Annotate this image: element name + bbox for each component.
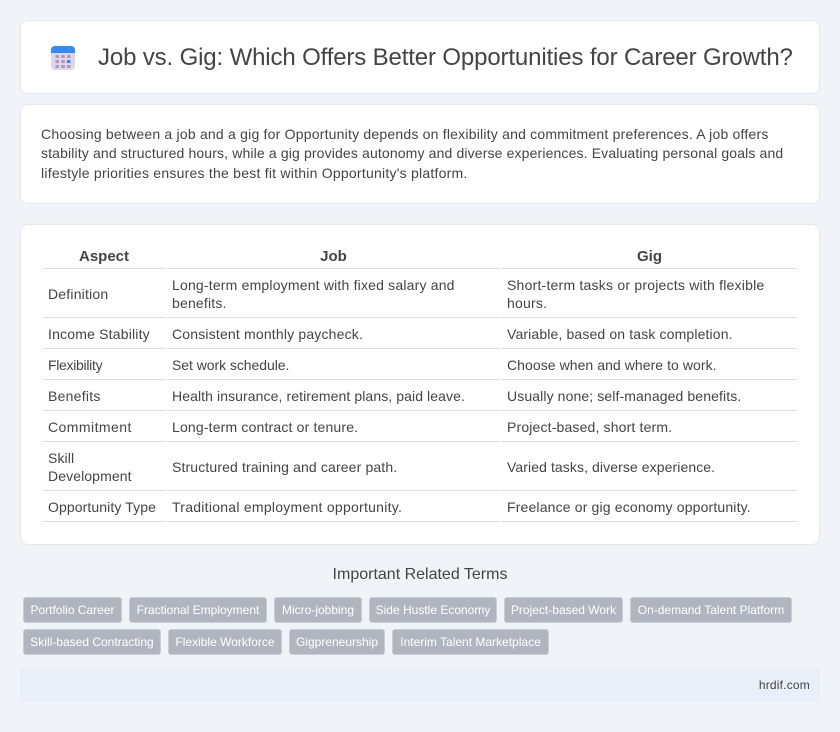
row: Income Stability: Income Stability [48, 326, 150, 342]
cell: Opportunity Type, job: Traditional employment opportunity. [172, 499, 402, 515]
cell: Skill Development, gig: Varied tasks, diverse experience. [507, 459, 715, 475]
text block: intro line 3: lifestyle priorities ensures the best fit within Opportunity's platform. [41, 165, 468, 181]
tag [129, 597, 267, 623]
tag [369, 597, 497, 623]
tag [23, 629, 161, 655]
cell: Skill Development, job: Structured training and career path. [172, 459, 397, 475]
text block: intro line 2: stability and structured hours, while a gig provides autonomy and diverse experiences. Evaluating personal goals and [41, 145, 783, 161]
row: Commitment: Commitment [48, 419, 132, 435]
cell: Definition, gig: Short-term tasks or projects with flexible [507, 277, 764, 293]
cell: Definition, job: Long-term employment with fixed salary and [172, 277, 455, 293]
table header: Aspect: Aspect [79, 248, 129, 265]
row: Benefits: Benefits [48, 388, 101, 404]
cell: Definition, job [172, 277, 455, 311]
row: Skill Development [48, 450, 132, 484]
tag: Skill-based Contracting [30, 635, 154, 649]
panel: title header [20, 20, 820, 94]
tag: Fractional Employment [137, 603, 259, 617]
row: Flexibility: Flexibility [48, 357, 102, 373]
tag: Project-based Work [511, 603, 616, 617]
tag [289, 629, 385, 655]
tag list: related terms [23, 597, 792, 655]
panel: comparison table [20, 224, 820, 545]
footer source: hrdif.com [759, 678, 810, 692]
row: Opportunity Type: Opportunity Type [48, 499, 156, 515]
table header: Gig: Gig [637, 248, 662, 265]
cell: Benefits, job: Health insurance, retirement plans, paid leave. [172, 388, 465, 404]
tag [392, 629, 549, 655]
text block: intro line 1: Choosing between a job and a gig for Opportunity depends on flexibility and commitment preferences. A job offers [41, 126, 769, 142]
cell: Income Stability, gig: Variable, based on task completion. [507, 326, 733, 342]
table header: Job: Job [320, 248, 347, 265]
panel: introduction [20, 104, 820, 204]
tag [23, 597, 122, 623]
tag: Micro-jobbing [282, 603, 354, 617]
heading: related terms: Important Related Terms [333, 566, 507, 583]
tag [504, 597, 623, 623]
tag [168, 629, 282, 655]
cell: Definition, gig [507, 277, 764, 311]
row: Skill Development: Development [48, 468, 132, 484]
cell: Flexibility, job: Set work schedule. [172, 357, 289, 373]
cell: Definition, gig: hours. [507, 295, 547, 311]
cell: Opportunity Type, gig: Freelance or gig economy opportunity. [507, 499, 751, 515]
cell: Commitment, gig: Project-based, short term. [507, 419, 672, 435]
cell: Income Stability, job: Consistent monthly paycheck. [172, 326, 363, 342]
icon: calendar [51, 46, 75, 70]
tag: Gigpreneurship [296, 635, 378, 649]
tag: Side Hustle Economy [376, 603, 490, 617]
tag: Interim Talent Marketplace [400, 635, 541, 649]
row: Definition: Definition [48, 286, 108, 302]
title: Job vs. Gig: Which Offers Better Opportunities for Career Growth? [98, 44, 793, 71]
tag: On-demand Talent Platform [638, 603, 784, 617]
row: Skill Development: Skill [48, 450, 74, 466]
cell: Commitment, job: Long-term contract or tenure. [172, 419, 358, 435]
tag [274, 597, 362, 623]
cell: Definition, job: benefits. [172, 295, 227, 311]
footer [20, 668, 820, 702]
tag [630, 597, 792, 623]
cell: Flexibility, gig: Choose when and where to work. [507, 357, 717, 373]
tag: Portfolio Career [30, 603, 115, 617]
cell: Benefits, gig: Usually none; self-managed benefits. [507, 388, 741, 404]
tag: Flexible Workforce [175, 635, 275, 649]
